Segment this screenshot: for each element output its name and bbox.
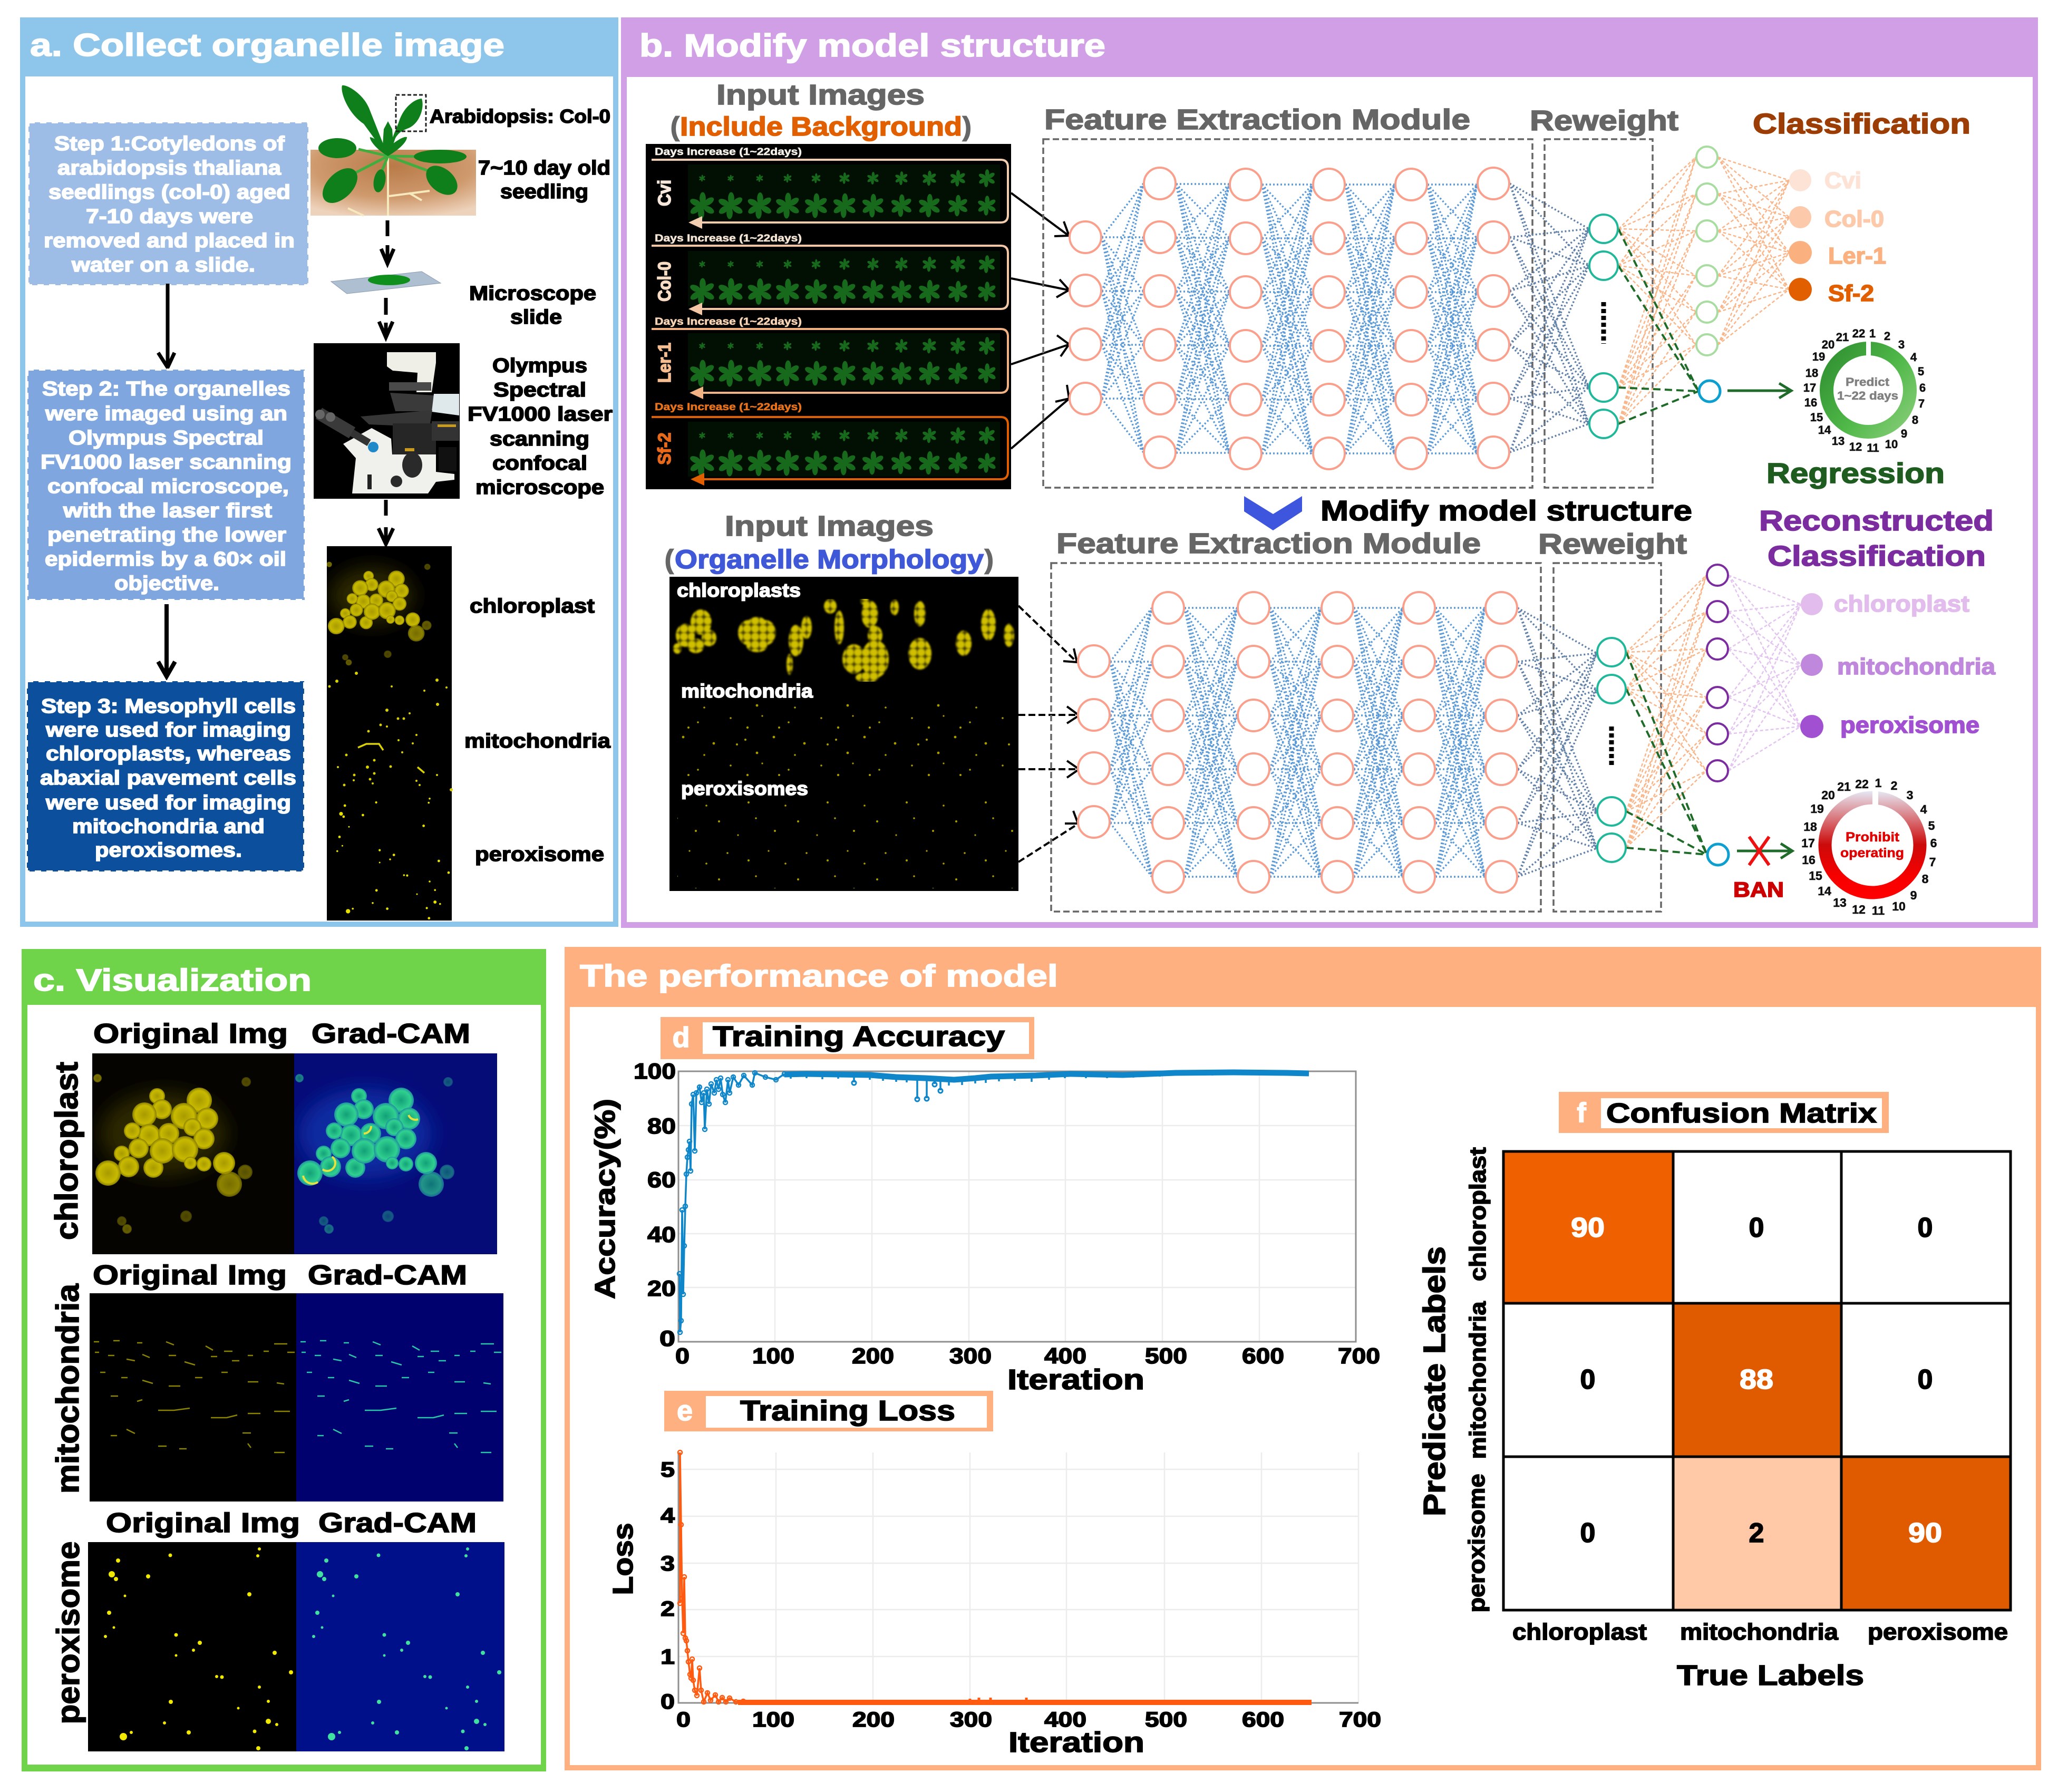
row 1 label: chloroplast: chloroplast [49, 1062, 84, 1240]
row 3 captions: Original Img [106, 1508, 300, 1538]
chart: training accuracy: 300 [949, 1343, 992, 1368]
image: chloroplast original [92, 1053, 294, 1254]
network: top classification head [1589, 147, 1789, 438]
step 2 box: epidermis by a 60× oil [45, 548, 286, 570]
label f: confusion matrix [1559, 1092, 1889, 1133]
chart: confusion matrix: mitochondria [1680, 1619, 1839, 1645]
network: bottom feature extraction [1078, 592, 1597, 893]
donut: prohibit operating: 1 [1875, 776, 1882, 790]
dashed box: feature extraction, top [1043, 139, 1532, 488]
loss y axis title: Loss [607, 1523, 639, 1595]
dashed arrow: slide to microscope [379, 298, 393, 337]
label e: training loss: e [677, 1395, 693, 1427]
input image strip: plants by day: Days Increase (1~22days) [655, 316, 802, 327]
chart: training loss: 0 [676, 1708, 691, 1731]
input image strip: organelles [669, 577, 1018, 891]
label d: training accuracy [661, 1017, 1034, 1059]
heading: modify model structure: Modify model structure [1321, 495, 1692, 527]
heading: classification: Classification [1753, 108, 1970, 140]
step 1 box: removed and placed in [44, 230, 295, 252]
donut: prohibit operating: 7 [1929, 855, 1936, 869]
donut: predict days: 5 [1918, 365, 1924, 378]
image: chloroplast grad-cam [294, 1053, 497, 1254]
chart: training accuracy: 500 [1145, 1343, 1187, 1368]
dashed box: feature extraction, bottom [1051, 563, 1541, 912]
image: mitochondria grad-cam [296, 1293, 503, 1502]
heading: input images, background: Input Images [716, 79, 925, 111]
label: microscope slide [469, 283, 596, 328]
step 1 box: Step 1:Cotyledons of [54, 133, 285, 155]
legend: plant classes: Ler-1 [1828, 243, 1886, 269]
step 3 box [27, 681, 304, 871]
label: chloroplast: chloroplast [470, 595, 595, 617]
donut: prohibit operating [1801, 776, 1937, 917]
donut: predict days [1803, 327, 1926, 454]
label: ban: BAN [1733, 878, 1784, 902]
row 2 captions [93, 1260, 467, 1291]
panel c: visualization [22, 949, 546, 1771]
image: mitochondria original [90, 1293, 296, 1502]
heading: reconstructed classification: Classification [1768, 540, 1986, 572]
microscope slide [331, 272, 441, 294]
legend: plant classes: Sf-2 [1828, 280, 1874, 306]
label e: training loss: Training Loss [740, 1395, 955, 1427]
row 1 captions: Original Img [93, 1019, 288, 1049]
accuracy curve [679, 1072, 1309, 1332]
performance panel title: The performance of model [580, 959, 1058, 993]
icon: modify chevron [1244, 496, 1302, 530]
donut: prohibit operating: 17 [1801, 836, 1815, 850]
network: reconstructed classification head [1597, 565, 1801, 865]
chart: confusion matrix: 2 [1749, 1518, 1764, 1548]
chart: training accuracy: 20 [647, 1276, 676, 1301]
step 2 box: penetrating the lower [47, 524, 286, 546]
step 3 box: chloroplasts, whereas [46, 743, 291, 765]
donut: prohibit operating: 15 [1809, 869, 1822, 883]
donut: predict days: 22 [1852, 327, 1865, 340]
chart: training accuracy: 200 [852, 1343, 894, 1368]
chart: training accuracy [589, 1059, 1380, 1396]
donut: predict days: 2 [1884, 330, 1890, 343]
label: microscope model: confocal [492, 452, 587, 474]
input image strip: organelles: mitochondria [681, 680, 813, 702]
arrows: plant input to network [1011, 193, 1069, 449]
dashed arrow: seedling to slide [381, 220, 394, 264]
chart: training accuracy: 100 [752, 1343, 794, 1368]
chart: confusion matrix: peroxisome [1464, 1474, 1490, 1612]
accuracy y axis title: Accuracy(%) [589, 1099, 621, 1299]
label f: confusion matrix: Confusion Matrix [1606, 1098, 1877, 1129]
heading: reconstructed classification [1759, 505, 1994, 572]
step 1 box: arabidopsis thaliana [57, 157, 281, 179]
row 3 captions [106, 1508, 477, 1538]
heading: input images, background: ) [963, 112, 972, 141]
chart: confusion matrix [1464, 1147, 2011, 1645]
chart: training loss: 1 [661, 1645, 675, 1669]
chart: confusion matrix: 0 [1580, 1364, 1595, 1395]
donut: prohibit operating: Prohibit [1846, 830, 1900, 845]
microscope image [314, 343, 460, 499]
arrow: step 2 to step 3 [158, 604, 175, 676]
chart: training accuracy: 700 [1338, 1343, 1380, 1368]
input image strip: plants by day: Days Increase (1~22days) [655, 402, 802, 413]
label: microscope model: Olympus [492, 355, 587, 377]
donut: predict days: 8 [1912, 413, 1918, 427]
step 3 box: abaxial pavement cells [40, 767, 296, 789]
dashed box: reweight, top [1545, 139, 1653, 488]
label: microscope model: Spectral [493, 379, 586, 401]
legend: organelle classes: peroxisome [1840, 712, 1979, 738]
donut: predict days: 1~22 days [1837, 389, 1898, 402]
panel a title: a. Collect organelle image [30, 27, 504, 63]
chart: training loss: 400 [1044, 1708, 1086, 1731]
label: microscope model: FV1000 laser [468, 403, 613, 425]
chart: training loss: 300 [950, 1708, 992, 1731]
donut: prohibit operating: 16 [1802, 853, 1816, 867]
label: peroxisome: peroxisome [475, 844, 604, 866]
donut: predict days: 20 [1822, 338, 1834, 351]
chart: training loss: 2 [661, 1597, 675, 1621]
row 2 label: mitochondria: mitochondria [50, 1283, 85, 1494]
panel b title: b. Modify model structure [639, 28, 1105, 63]
label: microscope slide: Microscope [469, 283, 596, 305]
legend: plant classes: Cvi [1824, 168, 1861, 193]
heading: input images, organelle: Organelle Morphology [675, 545, 984, 574]
donut: prohibit operating: 19 [1810, 802, 1824, 816]
legend: plant classes [1789, 168, 1886, 306]
input image strip: plants by day: Days Increase (1~22days) [655, 233, 802, 244]
row 3 captions: Grad-CAM [318, 1508, 477, 1538]
donut: predict days: Predict [1846, 375, 1890, 389]
step 2 box: were imaged using an [45, 403, 287, 425]
panel: performance of model [565, 947, 2041, 1770]
donut: prohibit operating: 5 [1928, 819, 1935, 832]
chart: training loss: 3 [661, 1552, 675, 1575]
input image strip: plants by day: Ler-1 [655, 343, 675, 383]
step 2 box: confocal microscope, [47, 476, 289, 498]
step 3 box: were used for imaging [45, 792, 291, 814]
step 3 box: were used for imaging [45, 719, 291, 741]
donut: predict days: 19 [1812, 350, 1825, 363]
donut: predict days: 14 [1818, 423, 1831, 437]
legend: organelle classes [1800, 591, 1996, 738]
label d: training accuracy: d [673, 1022, 690, 1053]
donut: prohibit operating: 22 [1855, 777, 1869, 791]
donut: prohibit operating: 18 [1803, 820, 1817, 834]
row 3 label: peroxisome: peroxisome [51, 1542, 86, 1724]
step 1 box: 7-10 days were [86, 206, 253, 228]
input image strip: plants by day [646, 144, 1011, 489]
donut: predict days: 16 [1804, 396, 1817, 409]
chart: training accuracy: 400 [1044, 1343, 1086, 1368]
input image strip: plants by day: Sf-2 [655, 432, 675, 465]
chart: training loss: 600 [1242, 1708, 1284, 1731]
row 1 captions [93, 1019, 470, 1049]
step 2 box: Step 2: The organelles [42, 378, 290, 400]
heading: reweight, bottom: Reweight [1538, 528, 1687, 560]
step 3 box: mitochondria and [72, 816, 265, 838]
donut: predict days: 21 [1836, 331, 1849, 344]
chart: training loss: 100 [752, 1708, 794, 1731]
donut: predict days: 7 [1918, 397, 1925, 410]
legend: organelle classes: chloroplast [1834, 591, 1969, 617]
heading: regression: Regression [1766, 458, 1945, 489]
chart: confusion matrix: 0 [1918, 1364, 1933, 1395]
donut: predict days: 15 [1810, 411, 1823, 424]
chart: training loss: 200 [852, 1708, 895, 1731]
step 3 box: peroxisomes. [95, 839, 242, 861]
chart: confusion matrix: 90 [1908, 1518, 1942, 1548]
chart: training accuracy: 80 [647, 1113, 676, 1138]
label f: confusion matrix: f [1577, 1098, 1586, 1128]
row 1 captions: Grad-CAM [312, 1019, 470, 1049]
arrows: organelle input to network [1018, 606, 1079, 862]
donut: prohibit operating: 9 [1910, 888, 1917, 902]
chart: confusion matrix: chloroplast [1465, 1147, 1491, 1281]
donut: predict days: 9 [1901, 427, 1907, 440]
donut: predict days: 13 [1832, 434, 1845, 448]
donut: predict days: 10 [1885, 438, 1898, 451]
step 2 box [27, 370, 305, 600]
chart: confusion matrix: 0 [1580, 1518, 1595, 1548]
donut: prohibit operating: 10 [1892, 899, 1906, 913]
step 2 box: objective. [114, 573, 219, 595]
donut: prohibit operating: operating [1840, 846, 1904, 860]
loss curve [680, 1452, 1312, 1702]
chart: training accuracy: 0 [675, 1343, 690, 1368]
heading: input images, organelle: Input Images [725, 510, 934, 542]
donut: prohibit operating: 12 [1852, 903, 1866, 916]
image: peroxisome grad-cam [296, 1542, 504, 1751]
heading: reweight, top: Reweight [1530, 105, 1678, 137]
label e: training loss [664, 1391, 993, 1431]
label d: training accuracy: Training Accuracy [713, 1021, 1005, 1052]
loss x axis title: Iteration [1008, 1727, 1144, 1758]
input image strip: plants by day: Cvi [655, 180, 675, 206]
chart: confusion matrix: 0 [1749, 1213, 1764, 1243]
image: peroxisome original [88, 1542, 296, 1751]
chart: training loss: 500 [1145, 1708, 1187, 1731]
heading: input images, background: Include Background [680, 112, 962, 141]
label: microscope model: scanning [490, 428, 589, 450]
donut: predict days: 4 [1910, 351, 1917, 364]
step 1 box [28, 122, 308, 285]
chart: confusion matrix: mitochondria [1465, 1301, 1491, 1459]
chart: training accuracy: 600 [1242, 1343, 1284, 1368]
heading: input images, organelle: ) [985, 545, 994, 574]
label: arabidopsis: Arabidopsis: Col-0 [430, 105, 610, 127]
panel c title: c. Visualization [33, 963, 312, 997]
chart: training accuracy: 100 [634, 1059, 676, 1083]
heading: feature extraction module, top: Feature Extraction Module [1044, 104, 1470, 135]
chart: confusion matrix: chloroplast [1512, 1619, 1647, 1645]
chart: training loss [607, 1452, 1381, 1758]
step 3 box: Step 3: Mesophyll cells [41, 695, 296, 718]
step 2 box: FV1000 laser scanning [41, 451, 292, 473]
chart: training loss: 0 [661, 1690, 675, 1713]
input image strip: plants by day: Col-0 [655, 261, 675, 302]
heading: reconstructed classification: Reconstructed [1759, 505, 1994, 537]
network: top feature extraction [1070, 168, 1589, 469]
label: microscope model [468, 355, 613, 499]
label: microscope slide: slide [510, 306, 562, 328]
chart: confusion matrix: 90 [1571, 1213, 1605, 1243]
heading: feature extraction module, bottom: Feature Extraction Module [1056, 528, 1481, 559]
label: mitochondria: mitochondria [464, 730, 611, 752]
axis title: predicate labels: Predicate Labels [1418, 1246, 1452, 1516]
label: seedling age [478, 157, 610, 203]
row 2 captions: Grad-CAM [308, 1260, 467, 1291]
chart: confusion matrix: 88 [1740, 1364, 1773, 1395]
input image strip: organelles: peroxisomes [681, 778, 808, 799]
donut: predict days: 1 [1869, 327, 1876, 340]
chart: confusion matrix: peroxisome [1868, 1619, 2008, 1645]
chart: training accuracy: 40 [647, 1222, 676, 1247]
donut: prohibit operating: 2 [1891, 779, 1897, 792]
donut: predict days: 11 [1867, 441, 1879, 454]
seedling illustration [310, 85, 476, 216]
dashed box: reweight, bottom [1554, 563, 1661, 912]
label: seedling age: 7~10 day old [478, 157, 610, 179]
donut: predict days: 6 [1919, 381, 1926, 394]
step 2 box: with the laser first [63, 500, 272, 522]
step 2 box: Olympus Spectral [69, 427, 264, 449]
arrow: microscope to images [378, 500, 393, 544]
accuracy x axis title: Iteration [1007, 1364, 1144, 1396]
chart: training loss: 700 [1339, 1708, 1381, 1731]
donut: prohibit operating: 14 [1818, 884, 1831, 898]
label: seedling age: seedling [500, 181, 588, 203]
donut: prohibit operating: 11 [1872, 904, 1885, 917]
donut: predict days: 3 [1898, 338, 1905, 351]
confocal image strip [326, 546, 453, 921]
chart: training loss: 5 [661, 1458, 675, 1481]
legend: organelle classes: mitochondria [1837, 654, 1996, 680]
panel a: collect organelle image [20, 17, 618, 927]
heading: input images, organelle [665, 510, 994, 574]
donut: prohibit operating: 6 [1930, 836, 1937, 850]
legend: plant classes: Col-0 [1824, 206, 1884, 232]
chart: confusion matrix: 0 [1918, 1213, 1933, 1243]
arrow: regression output [1727, 383, 1791, 398]
arrow: banned regression output [1737, 837, 1792, 865]
donut: prohibit operating: 20 [1821, 788, 1835, 802]
axis title: true labels: True Labels [1677, 1660, 1864, 1691]
chart: training accuracy: 0 [659, 1326, 675, 1351]
label: microscope model: microscope [475, 477, 604, 499]
panel b: modify model structure [621, 17, 2038, 928]
row 2 captions: Original Img [93, 1260, 287, 1291]
input image strip: plants by day: Days Increase (1~22days) [655, 147, 802, 158]
step 1 box: seedlings (col-0) aged [48, 181, 290, 204]
donut: prohibit operating: 8 [1922, 872, 1929, 886]
chart: training loss: 4 [661, 1504, 675, 1527]
donut: predict days: 17 [1803, 381, 1816, 394]
chart: training accuracy: 60 [647, 1167, 676, 1192]
heading: input images, organelle: ( [665, 545, 674, 574]
donut: prohibit operating: 4 [1920, 802, 1927, 816]
donut: prohibit operating: 13 [1833, 896, 1847, 909]
donut: prohibit operating: 3 [1907, 788, 1913, 802]
step 1 box: water on a slide. [71, 254, 255, 276]
input image strip: organelles: chloroplasts [677, 579, 801, 601]
donut: predict days: 18 [1805, 366, 1818, 380]
heading: input images, background [671, 79, 972, 141]
heading: input images, background: ( [671, 112, 679, 141]
donut: prohibit operating: 21 [1837, 780, 1851, 793]
arrow: step 1 to step 2 [158, 284, 174, 367]
donut: predict days: 12 [1849, 440, 1862, 453]
